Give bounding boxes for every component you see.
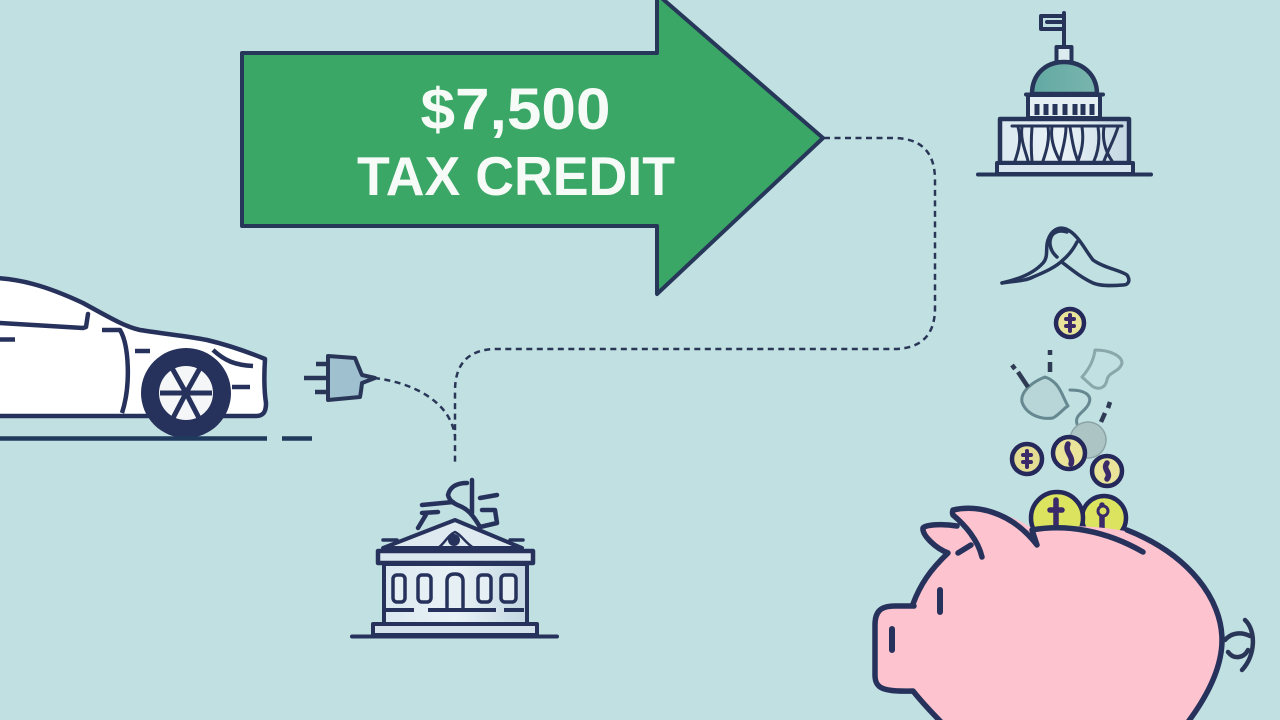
icon: electric car bbox=[0, 278, 312, 438]
bank rooftop emblem bbox=[418, 480, 497, 528]
icon: capitol building bbox=[978, 13, 1151, 174]
dashed path: plug to bank bbox=[374, 378, 455, 436]
icon: hanger-shaped swoosh bbox=[1002, 228, 1129, 286]
coins entering slot bbox=[1031, 492, 1126, 544]
icon: three coins bbox=[1012, 437, 1122, 486]
icon: falling coin top bbox=[1056, 309, 1084, 337]
icon: piggy bank bbox=[875, 492, 1253, 720]
green tax credit arrow bbox=[242, 0, 823, 294]
arrow label: tax credit: TAX CREDIT bbox=[357, 145, 675, 207]
road line bbox=[0, 436, 312, 441]
dashed path: arrow to plug bbox=[455, 138, 935, 462]
arrow label: amount: $7,500 bbox=[420, 77, 610, 142]
pig body bbox=[875, 510, 1222, 720]
icon: faded coin fragments bbox=[1012, 350, 1122, 458]
capitol dome bbox=[1032, 62, 1097, 94]
pig eye and nostril bbox=[892, 590, 940, 650]
capitol flag bbox=[1041, 13, 1064, 47]
icon: bank building bbox=[352, 480, 557, 636]
pig tail bbox=[1225, 620, 1253, 670]
icon: plug bbox=[304, 356, 375, 400]
car wheel bbox=[141, 348, 231, 438]
pig outline bbox=[875, 508, 1222, 720]
